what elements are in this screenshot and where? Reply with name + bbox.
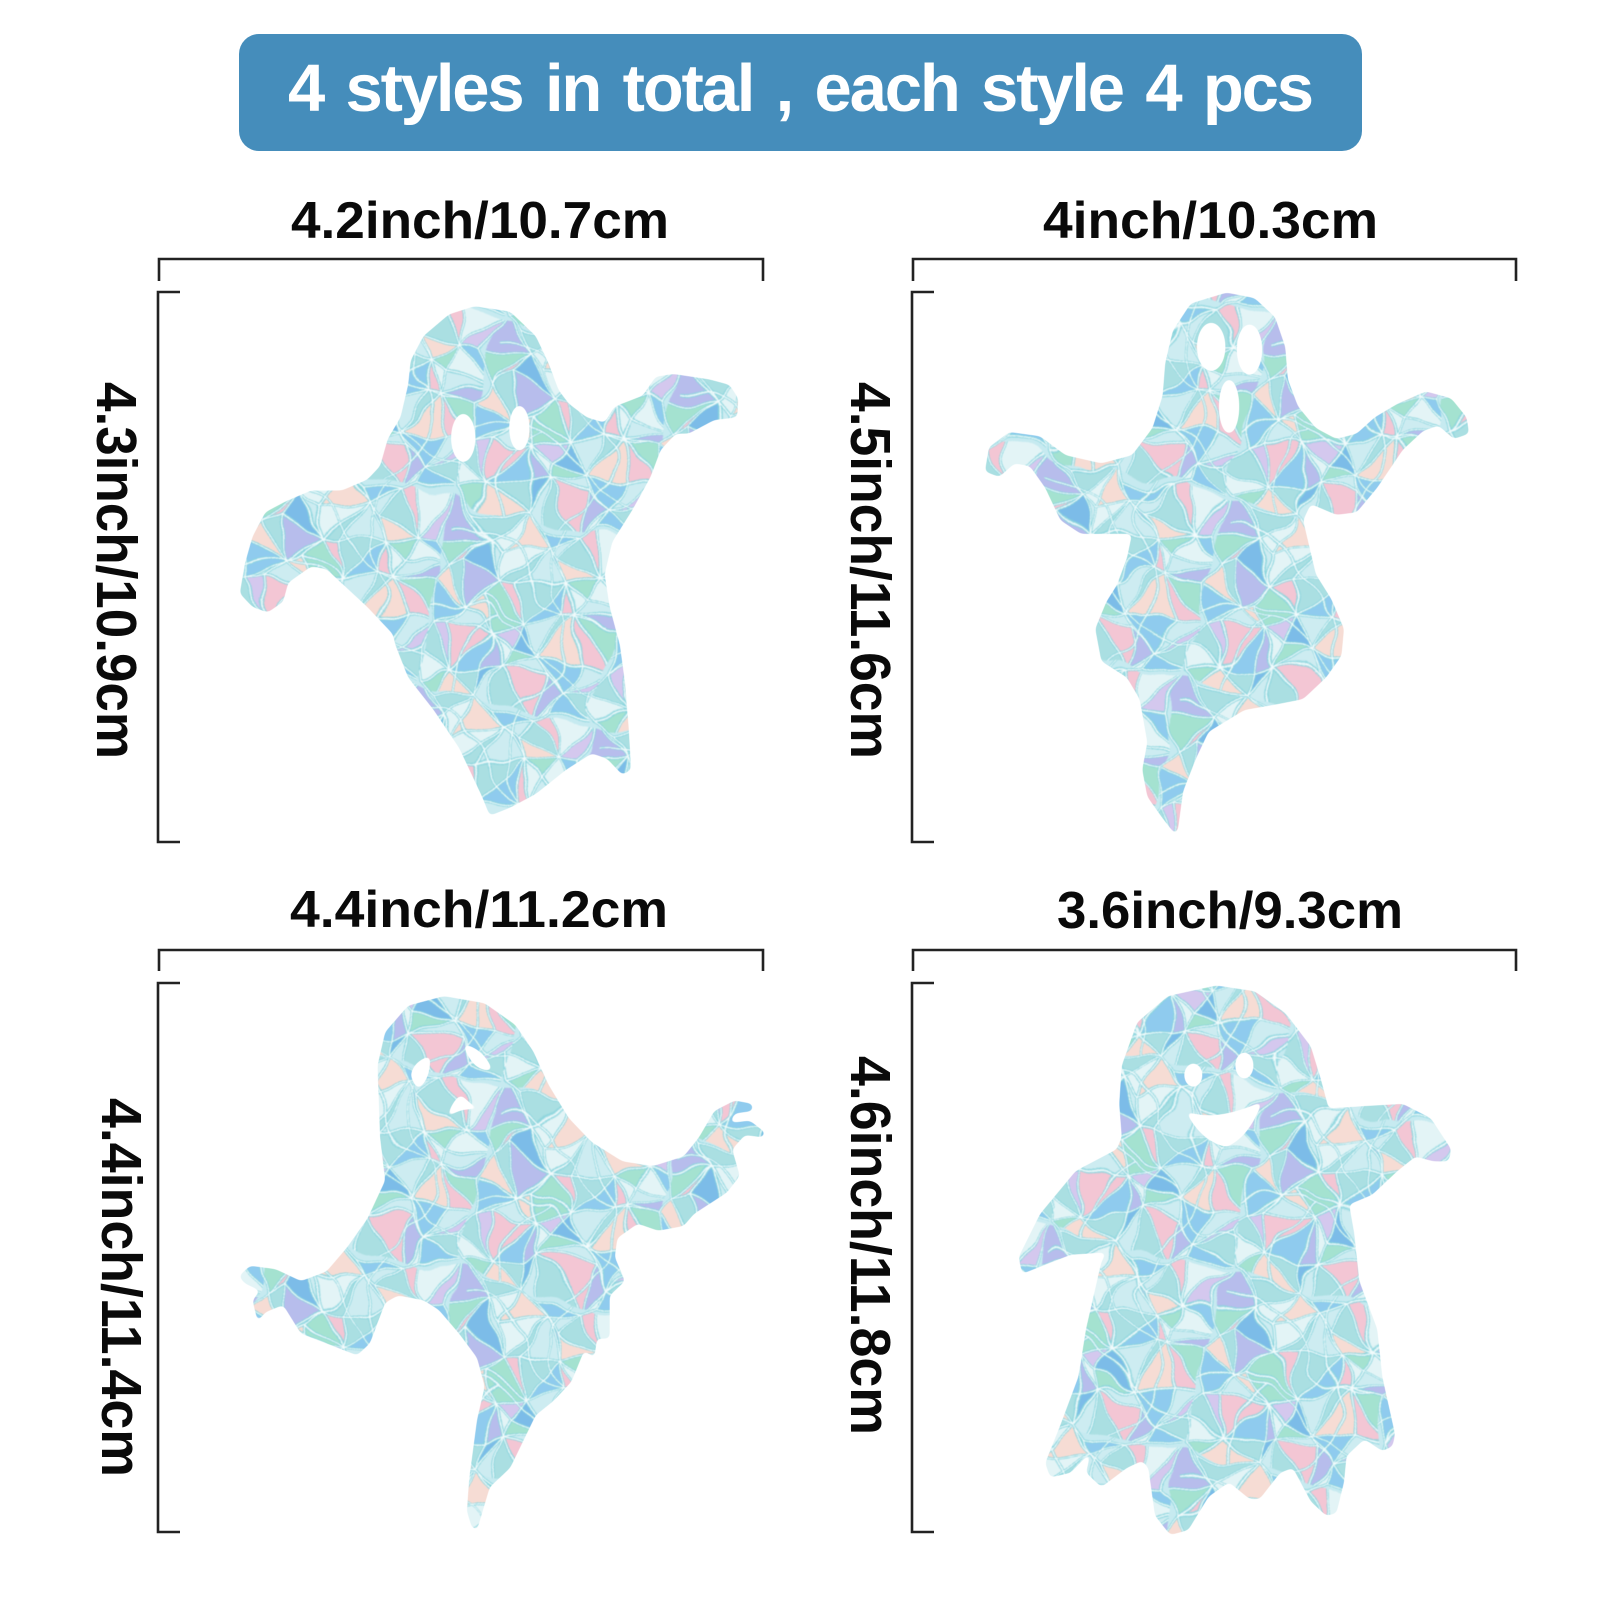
width bracket 2 (913, 259, 1516, 281)
height label 3: 4.4inch/11.4cm (89, 1098, 153, 1477)
panel: ghost style 1 (84, 192, 763, 842)
width bracket 1 (159, 259, 763, 281)
width label 4: 3.6inch/9.3cm (1057, 882, 1403, 940)
ghost 1 mosaic silhouette (225, 295, 755, 825)
height label 4: 4.6inch/11.8cm (838, 1056, 902, 1435)
width label 1: 4.2inch/10.7cm (291, 192, 669, 250)
height bracket 4 (912, 983, 934, 1532)
panel: ghost style 4 (838, 882, 1516, 1545)
ghost 3 mosaic silhouette (230, 990, 775, 1535)
height label 2: 4.5inch/11.6cm (838, 382, 902, 759)
ghost 4 mosaic silhouette (1005, 975, 1465, 1545)
height bracket 2 (912, 292, 934, 842)
panel: ghost style 3 (89, 881, 775, 1535)
width label 3: 4.4inch/11.2cm (290, 881, 668, 939)
title banner (239, 34, 1362, 151)
width label 2: 4inch/10.3cm (1043, 192, 1378, 250)
width bracket 3 (159, 950, 763, 971)
height label 1: 4.3inch/10.9cm (84, 382, 148, 759)
ghost 2 mosaic silhouette (975, 285, 1485, 840)
height bracket 1 (158, 292, 180, 842)
title banner: 4 styles in total , each style 4 pcs (288, 51, 1314, 126)
height bracket 3 (158, 983, 180, 1532)
width bracket 4 (913, 950, 1516, 971)
panel: ghost style 2 (838, 192, 1516, 842)
